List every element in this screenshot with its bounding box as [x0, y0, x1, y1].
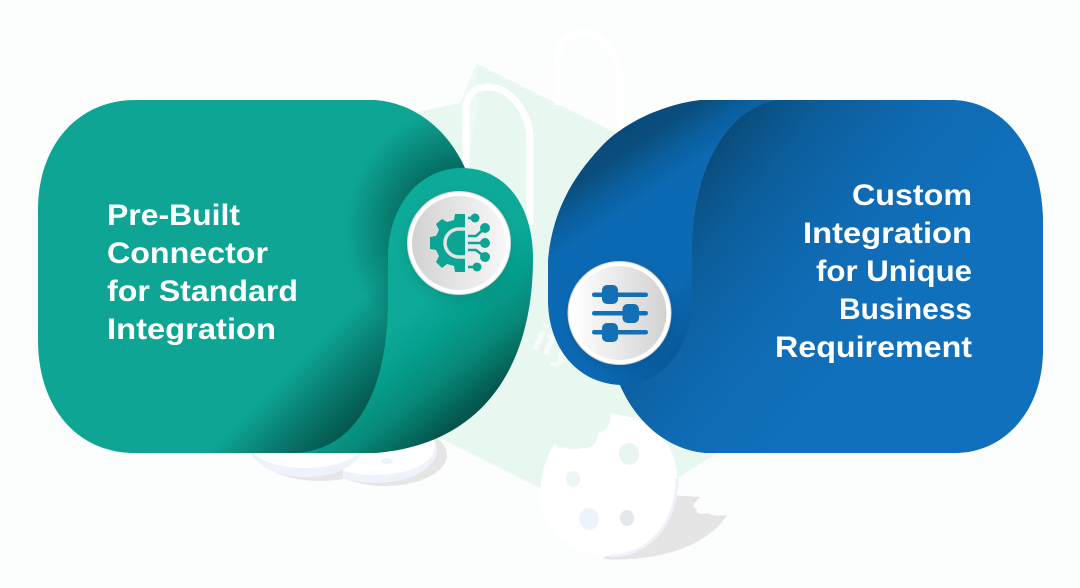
teal main shape: [38, 100, 468, 453]
heading: custom integration: Integration: [803, 217, 972, 250]
watermark: front shackle: [466, 87, 530, 225]
watermark: brand lettering: ify: [526, 317, 584, 374]
teal main shape edge shading: [38, 100, 468, 453]
watermark: cookie shadow: [603, 495, 727, 559]
heading: pre-built connector: Connector: [107, 237, 269, 270]
watermark: left coin: [249, 413, 363, 477]
blue front panel: [692, 100, 1043, 350]
watermark: right coin: [343, 440, 437, 483]
blue full silhouette: [617, 100, 1043, 453]
panel: custom integration (blue): [548, 100, 1043, 453]
blue back shape and icon lobe: [548, 100, 800, 385]
half gear: [430, 214, 465, 272]
teal icon lobe: [290, 168, 533, 453]
heading: pre-built connector: for Standard: [107, 275, 298, 308]
heading: pre-built connector: [107, 199, 298, 346]
heading: custom integration: Business: [839, 293, 972, 326]
icon: sliders disc: [568, 262, 673, 370]
panel: pre-built connector (teal): [38, 100, 533, 453]
infographic canvas: [38, 64, 1043, 560]
heading: custom integration: for Unique: [816, 255, 972, 288]
watermark: cookie: [540, 413, 677, 556]
heading: custom integration: [775, 179, 972, 364]
heading: custom integration: Requirement: [775, 331, 972, 364]
watermark: padlock, envelope and cookies: [249, 32, 730, 559]
heading: pre-built connector: Integration: [107, 313, 276, 346]
circuit traces: [468, 218, 485, 267]
icon: gear and circuit disc: [407, 192, 511, 301]
blue lobe shading: [600, 260, 692, 385]
heading: pre-built connector: Pre-Built: [107, 199, 240, 232]
watermark: back shackle: [557, 32, 620, 135]
heading: custom integration: Custom: [852, 179, 972, 212]
watermark: coin shadows: [260, 429, 380, 481]
watermark: envelope: [400, 64, 730, 488]
